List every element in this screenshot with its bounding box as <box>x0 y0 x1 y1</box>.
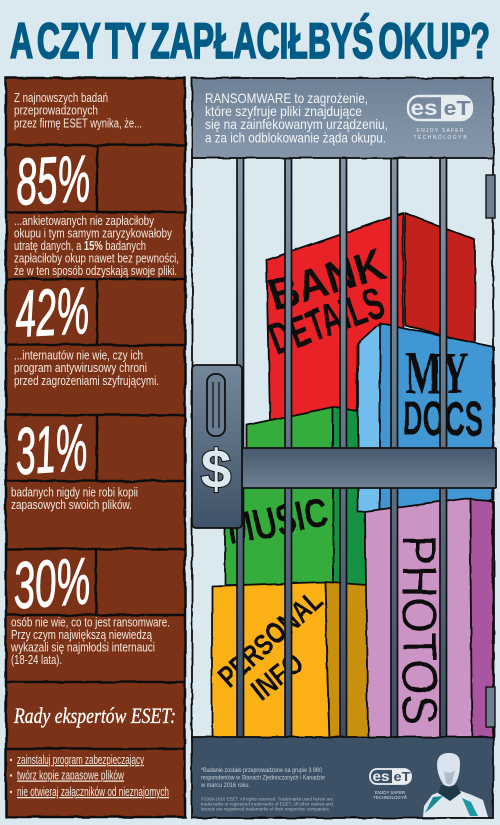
stat: 31%: 31% <box>13 410 90 488</box>
text: survey note: respondentów w Stanach Zjednoczonych i Kanadzie <box>201 776 326 782</box>
text: ransomware definition: które szyfruje pliki znajdujące <box>205 103 362 119</box>
logo: ESET: TECHNOLOGY® <box>414 134 467 141</box>
lock plate <box>192 365 242 528</box>
stat: 30%: 30% <box>11 543 93 622</box>
text: 42% description: program antywirusowy chroni <box>14 361 147 375</box>
text: 42% description: ...internautów nie wie, czy ich <box>14 348 143 362</box>
text: 30% description: Przy czym największą niewiedzą <box>11 628 152 642</box>
text: 30% description: osób nie wie, co to jest ransomware. <box>11 616 170 630</box>
logo: ESET footer: ENJOY SAFER <box>375 790 405 795</box>
panel: ransomware banner <box>192 78 493 158</box>
text: 42% description: przed zagrożeniami szyfrującymi. <box>14 374 159 388</box>
icon: handle <box>207 374 225 436</box>
logo: ESET: es <box>410 97 438 120</box>
text: 85% description: że w ten sposób odzyskają swoje pliki. <box>14 264 177 278</box>
list: expert tips: nie otwieraj załączników od nieznajomych <box>17 785 169 799</box>
text: copyright: brands are registered trademarks of their respective companies. <box>201 806 330 812</box>
logo: ESET footer <box>370 768 411 800</box>
text: ransomware definition <box>205 90 388 146</box>
list: expert tips: twórz kopie zapasowe plików <box>17 768 125 782</box>
icon: android mascot <box>423 753 488 817</box>
icon: dollar sign: $ <box>201 438 231 500</box>
text: 31% description: badanych nigdy nie robi kopii <box>11 486 138 500</box>
text: survey note <box>200 768 326 789</box>
text: 85% description <box>14 214 179 278</box>
text: copyright: ©1999-2016 ESET. All rights reserved. Trademarks used herein are <box>201 796 333 802</box>
text: survey note: *Badanie zostało przeprowadzone na grupie 3 860 <box>201 768 323 774</box>
logo: ESET footer: TECHNOLOGY® <box>373 795 408 800</box>
horizontal lock bar <box>240 448 496 488</box>
logo: ESET <box>408 96 472 141</box>
text: copyright: trademarks or registered trademarks of ESET. All other names and <box>201 802 333 806</box>
text: 30% description: wykazali się najmłodsi internauci <box>10 640 155 654</box>
brick pattern <box>6 78 185 817</box>
text: copyright <box>201 796 333 812</box>
logo: ESET: ENJOY SAFER <box>416 128 464 134</box>
gate frame <box>192 156 493 740</box>
intro text: Z najnowszych badań <box>14 91 108 105</box>
intro text: przeprowadzonych <box>14 104 98 118</box>
text: 30% description <box>10 616 170 667</box>
text: 85% description: utratę danych, a 15% badanych <box>14 239 146 253</box>
box: personal info: PERSONAL <box>213 585 329 694</box>
box: bank details: DETAILS <box>263 278 391 365</box>
right hinges <box>486 175 495 727</box>
box: music: MUSIC <box>223 488 331 553</box>
text: 85% description: okupu i tym samym zaryzykowałoby <box>14 226 173 240</box>
logo: ESET footer: es <box>372 768 390 784</box>
logo: ESET: eT <box>444 98 470 120</box>
text: ransomware definition: a za ich odblokowanie żąda okupu. <box>205 130 386 146</box>
box: bank details <box>263 213 475 422</box>
illustration: locked vault gate <box>192 156 496 740</box>
text: 30% description: (18-24 lata). <box>11 653 62 667</box>
text: ransomware definition: się na zainfekowanym urządzeniu, <box>205 116 388 132</box>
heading: expert advice: Rady ekspertów ESET: <box>13 703 176 728</box>
vertical bars <box>237 156 446 738</box>
panel: footer <box>192 737 493 818</box>
box: photos <box>365 498 494 740</box>
text: survey note: w marcu 2016 roku. <box>200 783 250 789</box>
text: 31% description: zapasowych swoich plików. <box>11 498 132 512</box>
list: expert tips: zainstaluj program zabezpieczający <box>17 753 144 767</box>
intro text: przez firmę ESET wynika, że... <box>14 116 142 130</box>
intro text <box>14 91 142 130</box>
list: expert tips <box>10 753 169 799</box>
box: bank details: BANK <box>263 239 391 321</box>
box: personal info: INFO <box>246 647 309 707</box>
logo: ESET footer: eT <box>394 769 411 784</box>
text: 31% description <box>11 486 138 512</box>
text: 42% description <box>14 348 159 388</box>
box: photos: PHOTOS <box>392 535 445 725</box>
text: 85% description: zapłaciłoby okup nawet bez pewności, <box>14 252 179 266</box>
box: music <box>223 407 366 585</box>
box: my docs <box>358 323 494 512</box>
text: 85% description: ...ankietowanych nie zapłaciłoby <box>14 214 155 228</box>
text: ransomware definition: RANSOMWARE to zagrożenie, <box>205 90 368 106</box>
box: personal info <box>212 582 369 740</box>
stat: 42%: 42% <box>13 273 91 351</box>
stat: 85%: 85% <box>14 141 92 219</box>
panel: brick wall <box>6 78 185 817</box>
